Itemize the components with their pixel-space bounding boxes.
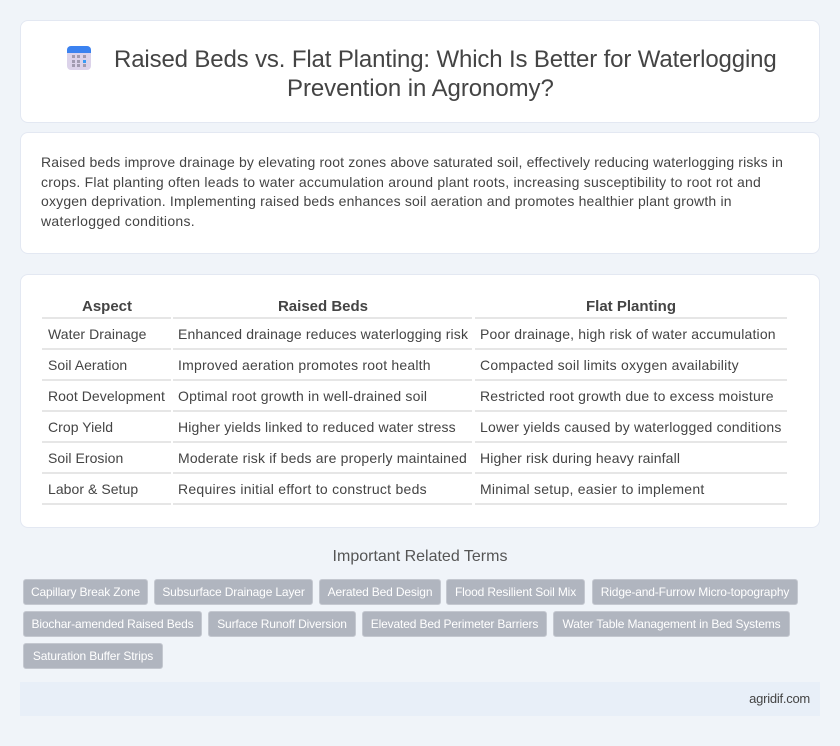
row: root development: Root Development [48, 388, 165, 404]
tag: Ridge-and-Furrow Micro-topography [601, 585, 789, 599]
heading: related terms: Important Related Terms [333, 548, 507, 565]
tag [208, 611, 356, 637]
tag [592, 579, 798, 605]
row: soil erosion: Soil Erosion [48, 450, 123, 466]
tag [446, 579, 585, 605]
panel: comparison table [20, 274, 820, 528]
icon: calendar [67, 46, 91, 70]
title: Raised Beds vs. Flat Planting: Which Is Better for Waterlogging [114, 46, 777, 73]
tag: Surface Runoff Diversion [217, 617, 347, 631]
tag: Aerated Bed Design [328, 585, 432, 599]
row: soil aeration: Soil Aeration [48, 357, 127, 373]
row: water drainage: Water Drainage [48, 326, 147, 342]
row: soil aeration: Compacted soil limits oxygen availability [480, 357, 739, 373]
tag [362, 611, 547, 637]
table header: Flat Planting [586, 298, 676, 315]
footer source: agridif.com [749, 691, 810, 706]
row: crop yield: Higher yields linked to reduced water stress [178, 419, 456, 435]
tag: Water Table Management in Bed Systems [563, 617, 780, 631]
row: soil erosion [48, 450, 680, 466]
related term tags [23, 579, 798, 669]
row: root development: Optimal root growth in well-drained soil [178, 388, 427, 404]
row: water drainage: Enhanced drainage reduces waterlogging risk [178, 326, 468, 342]
tag: Elevated Bed Perimeter Barriers [371, 617, 538, 631]
tag: Saturation Buffer Strips [33, 649, 153, 663]
tag [553, 611, 790, 637]
intro text: Raised beds improve drainage by elevating root zones above saturated soil, effectively reducing waterlogging risks in [41, 154, 783, 170]
intro text: waterlogged conditions. [41, 213, 195, 229]
table header: Raised Beds [278, 298, 368, 315]
footer [20, 682, 820, 716]
table header: Aspect [82, 298, 132, 315]
row: soil erosion: Higher risk during heavy rainfall [480, 450, 680, 466]
comparison table [42, 298, 787, 505]
row: crop yield [48, 419, 782, 435]
tag: Capillary Break Zone [31, 585, 140, 599]
title: Prevention in Agronomy? [287, 75, 554, 102]
panel: header [20, 20, 820, 123]
tag [154, 579, 313, 605]
panel: introduction [20, 132, 820, 254]
row: labor and setup: Labor & Setup [48, 481, 138, 497]
row: crop yield: Lower yields caused by waterlogged conditions [480, 419, 782, 435]
table header [82, 298, 676, 315]
intro text: crops. Flat planting often leads to water accumulation around plant roots, increasing susceptibility to root rot and [41, 174, 761, 190]
tag: Biochar-amended Raised Beds [31, 617, 194, 631]
row: water drainage: Poor drainage, high risk of water accumulation [480, 326, 776, 342]
row: soil aeration: Improved aeration promotes root health [178, 357, 431, 373]
row: root development [48, 388, 774, 404]
tag [23, 611, 202, 637]
row: crop yield: Crop Yield [48, 419, 113, 435]
title [114, 46, 777, 102]
row: soil erosion: Moderate risk if beds are properly maintained [178, 450, 467, 466]
tag: Subsurface Drainage Layer [162, 585, 305, 599]
tag [319, 579, 441, 605]
tag [23, 579, 148, 605]
row: root development: Restricted root growth due to excess moisture [480, 388, 774, 404]
tag: Flood Resilient Soil Mix [455, 585, 576, 599]
row: labor and setup [48, 481, 704, 497]
intro text [41, 154, 783, 229]
row: labor and setup: Requires initial effort to construct beds [178, 481, 427, 497]
intro text: oxygen deprivation. Implementing raised beds enhances soil aeration and promotes healthier plant growth in [41, 193, 732, 209]
row: soil aeration [48, 357, 739, 373]
row: labor and setup: Minimal setup, easier to implement [480, 481, 704, 497]
row: water drainage [48, 326, 776, 342]
tag [23, 643, 163, 669]
